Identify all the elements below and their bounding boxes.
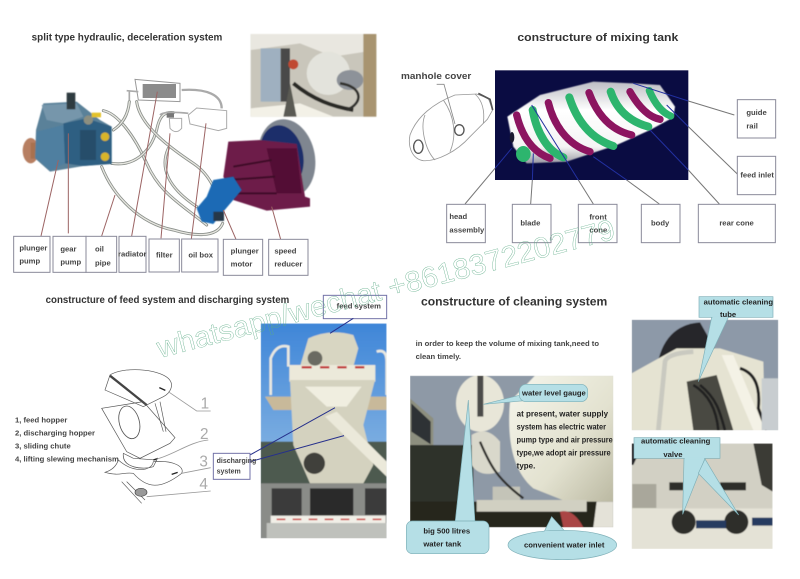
label: oil box: [182, 239, 218, 272]
photo: mixer truck rear: [261, 323, 387, 538]
photo: cleaning tube: [632, 320, 778, 430]
list: hopper parts: [15, 415, 119, 464]
list: hopper parts: 3, sliding chute: [15, 442, 71, 451]
label: rear cone: rear cone: [719, 219, 754, 228]
label: radiator: [118, 236, 147, 272]
label: feed system: [323, 295, 387, 333]
label: oil box: oil box: [188, 251, 214, 260]
callouts: numbered leaders: 4: [199, 476, 208, 493]
callouts: numbered leaders: 3: [199, 454, 208, 471]
label: manhole cover: manhole cover: [401, 71, 472, 81]
label: speed reducer: speed: [274, 246, 297, 255]
label: plunger motor: plunger: [231, 246, 259, 255]
overlay leaders: [495, 83, 688, 180]
label: body: body: [651, 219, 670, 228]
label: filter: filter: [156, 251, 173, 260]
list: hopper parts: 1, feed hopper: [15, 415, 67, 424]
illustration: mixing tank cutaway on navy: [495, 70, 688, 180]
illustration: plumbing lines: [102, 102, 223, 235]
callout: automatic cleaning tube: tube: [720, 310, 736, 319]
label: speed reducer: reducer: [274, 260, 302, 269]
label: oil pipe: [86, 236, 117, 272]
panel: construction of mixing tank: [401, 32, 776, 243]
callouts: numbered leaders: 1: [201, 395, 209, 412]
label: gear pump: [53, 236, 86, 272]
panel: feed and discharging system: [15, 295, 387, 538]
label: guide rail: guide: [746, 108, 767, 117]
text block: intro: [416, 339, 599, 361]
text block: water supply note: system has electric water: [517, 422, 606, 431]
heading: cleaning system: constructure of cleaning system: [421, 296, 607, 309]
photo: water tank on truck: [410, 375, 613, 527]
label: front cone: front: [589, 212, 607, 221]
leader lines: [465, 101, 737, 204]
illustration: filter: [160, 112, 188, 132]
label: head assembly: [447, 204, 485, 243]
callout: automatic cleaning tube: automatic cleaning: [704, 297, 773, 306]
text block: water supply note: [517, 409, 613, 471]
list: hopper parts: 2, discharging hopper: [15, 428, 95, 437]
heading: hydraulic system: split type hydraulic, deceleration system: [32, 33, 222, 44]
illustration: radiator: [127, 79, 222, 108]
label: plunger motor: [223, 239, 263, 275]
label: plunger pump: pump: [19, 257, 40, 266]
label: feed inlet: [737, 156, 776, 195]
watermark: whatsapp/wechat +8618372202779: [153, 214, 618, 365]
label: front cone: cone: [589, 226, 607, 235]
callout: water level gauge: water level gauge: [521, 389, 586, 398]
text block: water supply note: type.: [517, 462, 535, 471]
blades: [517, 91, 671, 158]
label: gear pump: gear: [60, 244, 77, 253]
illustration: speed reducer: [223, 115, 321, 211]
label: guide rail: [737, 100, 776, 138]
callout: automatic cleaning valve: [634, 437, 739, 515]
label: plunger motor: motor: [231, 260, 252, 269]
photo: cleaning valve: [632, 443, 773, 549]
label: oil pipe: pipe: [95, 258, 111, 267]
label: discharging system: system: [217, 469, 241, 476]
label: blade: [512, 204, 551, 243]
label: filter: [149, 239, 179, 272]
illustration: manhole tank line drawing: [409, 84, 493, 161]
label: plunger pump: plunger: [19, 243, 47, 252]
label: body: [641, 204, 680, 243]
heading: feed and discharging: constructure of feed system and discharging system: [46, 295, 289, 306]
panel: cleaning system: [406, 296, 778, 560]
text block: intro: clean timely.: [416, 352, 461, 361]
label: head assembly: assembly: [449, 225, 485, 234]
label: blade: blade: [520, 219, 540, 228]
heading: mixing tank: constructure of mixing tank: [517, 32, 679, 44]
callout: automatic cleaning valve: valve: [663, 450, 683, 459]
label: discharging system: discharging: [217, 458, 256, 465]
text block: intro: in order to keep the volume of mixing tank,need to: [416, 339, 599, 348]
callout: convenient water inlet: [508, 517, 617, 560]
callout: water level gauge: [483, 384, 588, 404]
callout: convenient water inlet: convenient water inlet: [524, 541, 605, 550]
label: feed inlet: feed inlet: [740, 171, 774, 180]
label: head assembly: head: [449, 212, 468, 221]
label: plunger pump: [14, 236, 50, 272]
list: hopper parts: 4, lifting slewing mechanism: [15, 455, 119, 464]
callout: big 500 litres water tank: big 500 litres: [423, 526, 470, 535]
callouts: numbered leaders: 2: [200, 426, 209, 443]
text block: water supply note: at present, water supply: [517, 409, 609, 418]
callouts: numbered leaders: [147, 392, 211, 497]
label: discharging system: [213, 408, 344, 479]
callout: automatic cleaning valve: automatic cleaning: [641, 437, 711, 446]
illustration: hydraulic pump: [23, 93, 112, 172]
callout: automatic cleaning tube: [698, 297, 773, 382]
label: radiator: radiator: [118, 250, 147, 259]
callout: big 500 litres water tank: [406, 400, 489, 554]
illustration: hopper exploded line drawing: [102, 370, 182, 503]
leader lines: [41, 92, 281, 242]
label: oil pipe: oil: [95, 245, 104, 254]
text block: water supply note: type,we adopt air pressure: [517, 448, 611, 457]
label: guide rail: rail: [746, 121, 758, 130]
label: front cone: [578, 204, 617, 243]
label: feed system: feed system: [337, 302, 381, 311]
label: gear pump: pump: [60, 258, 81, 267]
illustration: oil box: [188, 108, 227, 131]
text block: water supply note: pump type and air pressure: [517, 436, 613, 445]
panel: split type hydraulic, deceleration system: [14, 33, 376, 275]
label: rear cone: [698, 204, 775, 243]
callout: big 500 litres water tank: water tank: [422, 539, 462, 548]
illustration: plunger motor: [197, 177, 242, 224]
label: speed reducer: [269, 239, 308, 275]
photo: installed motor: [251, 34, 376, 117]
